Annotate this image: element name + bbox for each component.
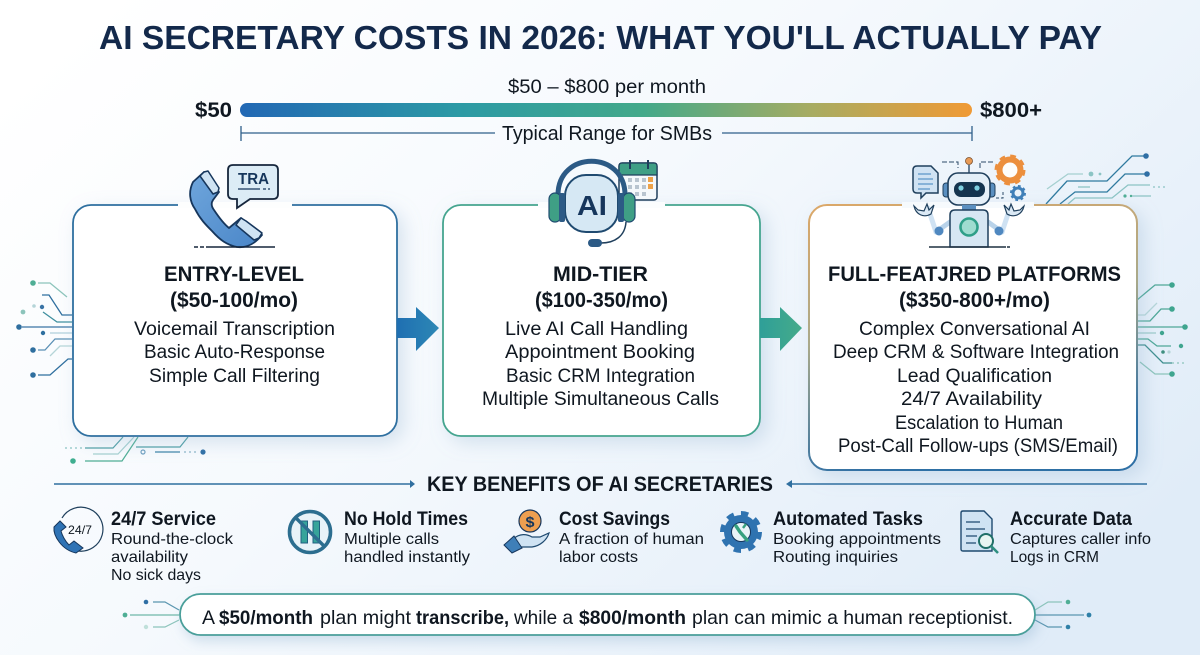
section heading: key benefits (54, 473, 1147, 496)
benefit description (344, 531, 470, 566)
benefit: cost savings (504, 509, 704, 566)
icon: clock and phone: 24/7 (68, 523, 92, 537)
benefit description (559, 531, 704, 566)
benefit heading: Cost Savings (559, 509, 670, 530)
card outline (73, 205, 397, 436)
heading text: KEY BENEFITS OF AI SECRETARIES (427, 473, 773, 496)
callout text: $50/month (219, 607, 313, 629)
feature list: Multiple Simultaneous Calls (482, 389, 719, 410)
benefit: 24/7 service (54, 507, 234, 584)
arrow: entry to mid (397, 307, 439, 351)
icon: AI headset and calendar: AI (577, 190, 607, 221)
callout circuits right (1035, 600, 1091, 629)
icon: gear and wrench (722, 514, 760, 550)
icon: clock and phone (54, 507, 103, 553)
circuit decoration: left (16, 280, 72, 378)
benefit description: Round-the-clock (111, 531, 234, 548)
feature list: Voicemail Transcription (134, 319, 335, 340)
price: ($50-100/mo) (170, 289, 298, 312)
feature list (833, 319, 1119, 457)
feature list: Post-Call Follow-ups (SMS/Email) (838, 436, 1118, 457)
heading: ENTRY-LEVEL (164, 263, 304, 286)
feature list (134, 319, 335, 387)
feature list: Live AI Call Handling (505, 319, 688, 340)
benefit description: handled instantly (344, 549, 470, 566)
icon: no pause symbol (290, 512, 330, 552)
feature list: Lead Qualification (897, 366, 1052, 387)
benefit description: Routing inquiries (773, 549, 898, 566)
icon: phone with speech bubble: TRA (238, 171, 269, 188)
circuit decoration: right (1137, 282, 1188, 377)
callout: price comparison (123, 594, 1091, 635)
icon: AI headset and calendar (549, 160, 657, 247)
benefit description: A fraction of human (559, 531, 704, 548)
callout text: transcribe, (416, 607, 509, 629)
panel: full-featured platforms (809, 156, 1137, 470)
icon: robot with gears (913, 156, 1025, 247)
callout text: plan might (320, 607, 412, 629)
panel: entry-level (73, 165, 397, 436)
feature list (482, 319, 719, 410)
benefit: automated tasks (722, 509, 941, 566)
range caption: $50 – $800 per month (508, 77, 706, 98)
card outline (809, 205, 1137, 470)
orange gear (996, 156, 1024, 184)
benefit: no hold times (290, 509, 470, 566)
feature list: Deep CRM & Software Integration (833, 342, 1119, 363)
feature list: Escalation to Human (895, 413, 1063, 434)
price gradient bar (240, 103, 972, 117)
callout text: A (202, 607, 215, 629)
benefit heading: Accurate Data (1010, 509, 1132, 530)
icon: coin over hand (504, 510, 549, 553)
callout text: plan can mimic a human receptionist. (692, 607, 1013, 629)
benefit heading: 24/7 Service (111, 509, 216, 530)
blue gear (1011, 186, 1025, 200)
feature list: Basic Auto-Response (144, 342, 325, 363)
circuit decoration: bottom left (65, 437, 206, 464)
title: AI SECRETARY COSTS IN 2026: WHAT YOU'LL ACTUALLY PAY (99, 19, 1102, 56)
arrow: right rule (792, 483, 1147, 485)
minimum price label: $50 (195, 99, 232, 122)
benefit description: Captures caller info (1010, 531, 1151, 548)
callout pill (180, 594, 1035, 635)
icon: document and magnifier (961, 511, 998, 553)
benefit description (773, 531, 941, 566)
benefit description: No sick days (111, 567, 201, 584)
heading: MID-TIER (553, 263, 648, 286)
price: ($100-350/mo) (535, 289, 668, 312)
callout circuits left (123, 600, 179, 629)
card outline (443, 205, 760, 436)
benefit description: Logs in CRM (1010, 549, 1099, 566)
benefit heading: No Hold Times (344, 509, 468, 530)
circuit decoration: top right (1046, 153, 1168, 204)
typical range label: Typical Range for SMBs (502, 123, 712, 145)
benefit: accurate data (961, 509, 1151, 566)
feature list: Simple Call Filtering (149, 366, 320, 387)
typical range bracket (241, 126, 972, 141)
arrow: mid to full (760, 307, 802, 351)
heading: FULL-FEATJRED PLATFORMS (828, 263, 1121, 286)
arrow: left rule (54, 483, 410, 485)
maximum price label: $800+ (980, 99, 1042, 122)
icon: coin over hand: $ (526, 514, 535, 531)
feature list: Appointment Booking (505, 342, 695, 363)
benefit description (111, 531, 234, 584)
benefit description (1010, 531, 1151, 566)
feature list: 24/7 Availability (901, 389, 1043, 410)
benefit description: labor costs (559, 549, 638, 566)
benefit heading: Automated Tasks (773, 509, 923, 530)
feature list: Basic CRM Integration (506, 366, 695, 387)
benefit description: Multiple calls (344, 531, 439, 548)
price: ($350-800+/mo) (899, 289, 1050, 312)
panel: mid-tier (443, 160, 760, 436)
price range scale (195, 77, 1042, 145)
callout text: $800/month (579, 607, 686, 629)
feature list: Complex Conversational AI (859, 319, 1090, 340)
benefit description: availability (111, 549, 188, 566)
icon: phone with speech bubble (190, 165, 278, 247)
callout text: while a (513, 607, 573, 629)
benefit description: Booking appointments (773, 531, 941, 548)
callout text (202, 607, 1013, 629)
